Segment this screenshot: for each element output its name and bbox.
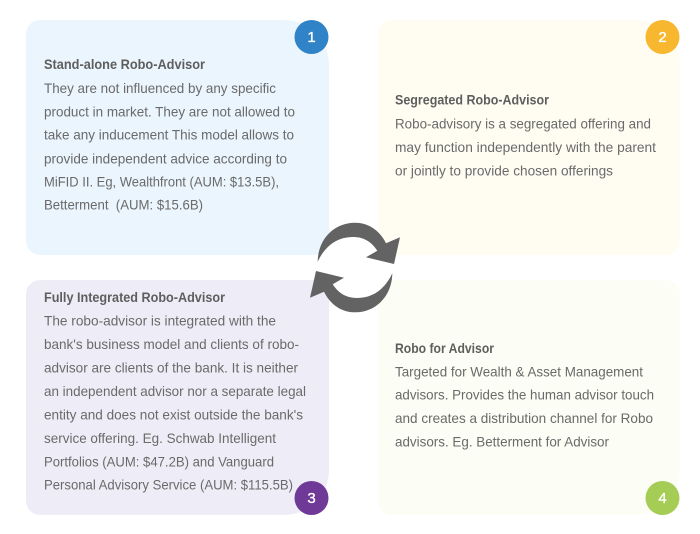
panel background (378, 280, 680, 515)
body text: Personal Advisory Service (AUM: $115.5B) (44, 477, 293, 493)
body text: advisor are clients of the bank. It is neither (44, 359, 298, 375)
panel background (26, 20, 329, 255)
arrow: lower clockwise (310, 271, 392, 312)
number badge 2: 2 (658, 29, 667, 46)
number badge 4: 4 (658, 490, 667, 507)
panel background (26, 280, 329, 515)
panel: segregated robo-advisor (378, 20, 680, 255)
body text: MiFID II. Eg, Wealthfront (AUM: $13.5B), (44, 173, 279, 189)
arrow: upper clockwise (318, 223, 400, 264)
number badge 4 (646, 481, 680, 515)
number badge 3: 3 (307, 490, 316, 507)
body text: Portfolios (AUM: $47.2B) and Vanguard (44, 453, 274, 469)
body text: bank's business model and clients of robo- (44, 336, 299, 352)
body text: may function independently with the parent (395, 139, 656, 155)
heading: Fully Integrated Robo-Advisor (44, 289, 225, 305)
panel: fully integrated robo-advisor (26, 280, 329, 515)
body text: product in market. They are not allowed to (44, 103, 295, 119)
body text: or jointly to provide chosen offerings (395, 162, 613, 178)
body text: The robo-advisor is integrated with the (44, 313, 276, 329)
number badge 1: 1 (307, 29, 316, 46)
body text: They are not influenced by any specific (44, 80, 276, 96)
heading: Stand-alone Robo-Advisor (44, 56, 205, 72)
body text: take any inducement This model allows to (44, 127, 294, 143)
number badge 1 (294, 20, 328, 54)
body text (44, 313, 306, 493)
body text: entity and does not exist outside the bank's (44, 406, 303, 422)
body text: provide independent advice according to (44, 150, 287, 166)
heading: Segregated Robo-Advisor (395, 92, 549, 108)
body text (395, 115, 656, 178)
heading: Robo for Advisor (395, 340, 494, 356)
number badge 2 (646, 20, 680, 54)
body text: an independent advisor nor a separate legal (44, 383, 306, 399)
icon: circular refresh arrows (310, 223, 400, 312)
body text: Betterment (AUM: $15.6B) (44, 197, 203, 213)
panel background (378, 20, 680, 255)
body text: advisors. Eg. Betterment for Advisor (395, 433, 609, 449)
panel: stand-alone robo-advisor (26, 20, 329, 255)
body text: Targeted for Wealth & Asset Management (395, 363, 643, 379)
body text: advisors. Provides the human advisor touch (395, 387, 654, 403)
body text (44, 80, 295, 213)
panel: robo for advisor (378, 280, 680, 515)
body text (395, 363, 654, 449)
body text: Robo-advisory is a segregated offering and (395, 115, 651, 131)
number badge 3 (294, 481, 328, 515)
body text: service offering. Eg. Schwab Intelligent (44, 430, 276, 446)
body text: and creates a distribution channel for Robo (395, 410, 653, 426)
